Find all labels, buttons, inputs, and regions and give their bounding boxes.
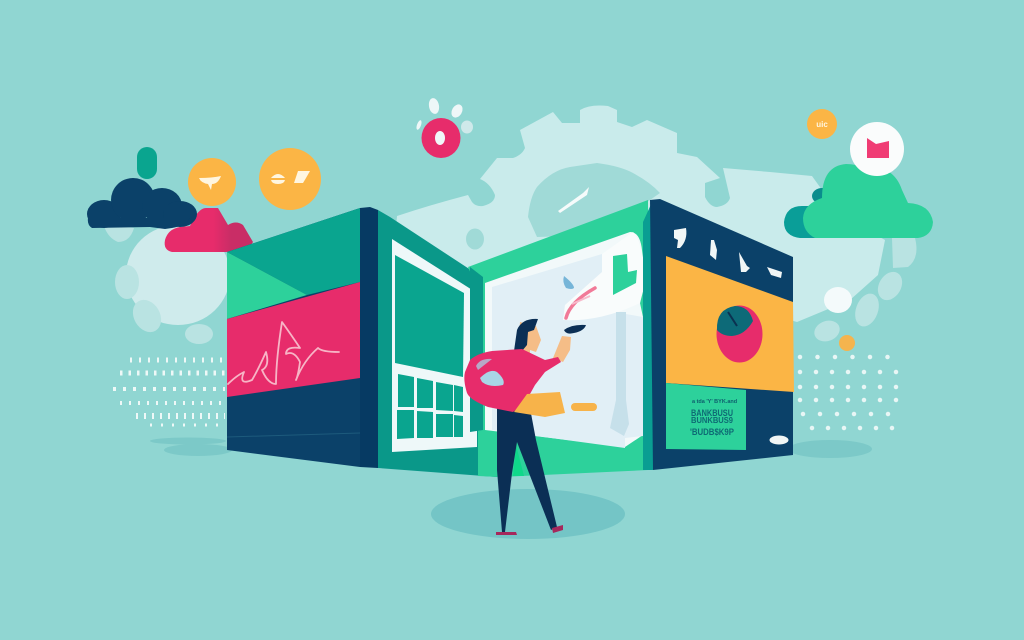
brush stroke — [566, 288, 595, 318]
white oval — [770, 436, 788, 444]
arm — [553, 336, 571, 362]
legs — [497, 405, 557, 532]
icon: red ring with petals — [415, 97, 473, 158]
neck and head — [518, 322, 541, 358]
icon: yellow circle left — [188, 158, 236, 206]
right dot field — [800, 357, 912, 428]
green text block: BUNKBUS9 — [691, 416, 734, 425]
green cloud — [803, 164, 933, 238]
icon: small yellow circle — [807, 109, 837, 139]
central gear backdrop — [392, 106, 885, 322]
window grid — [397, 374, 463, 439]
ground shadows — [150, 438, 872, 539]
green text block — [666, 383, 746, 450]
panel: left board — [227, 208, 360, 467]
green text block: 'BUDB$K9P — [690, 427, 734, 437]
icon: yellow circle middle — [259, 148, 321, 210]
pink band with line chart — [227, 282, 360, 397]
blue drop — [563, 276, 574, 289]
brush handle — [564, 325, 586, 334]
person — [464, 319, 597, 535]
yellow tag — [571, 403, 597, 411]
small icons — [674, 228, 782, 278]
white orb — [824, 287, 852, 313]
panel: right board — [650, 199, 794, 470]
navy spine — [360, 207, 378, 468]
right gear petals — [811, 238, 916, 345]
green text block: a tda 'Y' BYK.and — [692, 399, 737, 405]
teal fold — [643, 200, 653, 470]
left gear backdrop — [104, 225, 230, 344]
green text block: BANKBUSU — [691, 408, 733, 418]
icon: white badge with flag — [850, 122, 904, 176]
left dot field — [113, 360, 225, 425]
hair — [514, 319, 538, 351]
small yellow orb — [839, 335, 855, 351]
icon: green pill — [137, 147, 157, 179]
sweater — [464, 349, 561, 412]
green icon — [613, 254, 637, 295]
green gap — [513, 445, 524, 476]
panel: right book page — [468, 200, 648, 477]
navy cloud — [87, 178, 197, 229]
folder — [514, 392, 565, 417]
panel: middle board — [378, 210, 497, 477]
white flap — [563, 232, 645, 320]
pink cloud — [165, 208, 253, 252]
teal cloud back — [784, 188, 832, 238]
shoes — [496, 532, 517, 535]
pie chart — [716, 306, 762, 362]
icon: small yellow circle: uic — [816, 120, 828, 129]
